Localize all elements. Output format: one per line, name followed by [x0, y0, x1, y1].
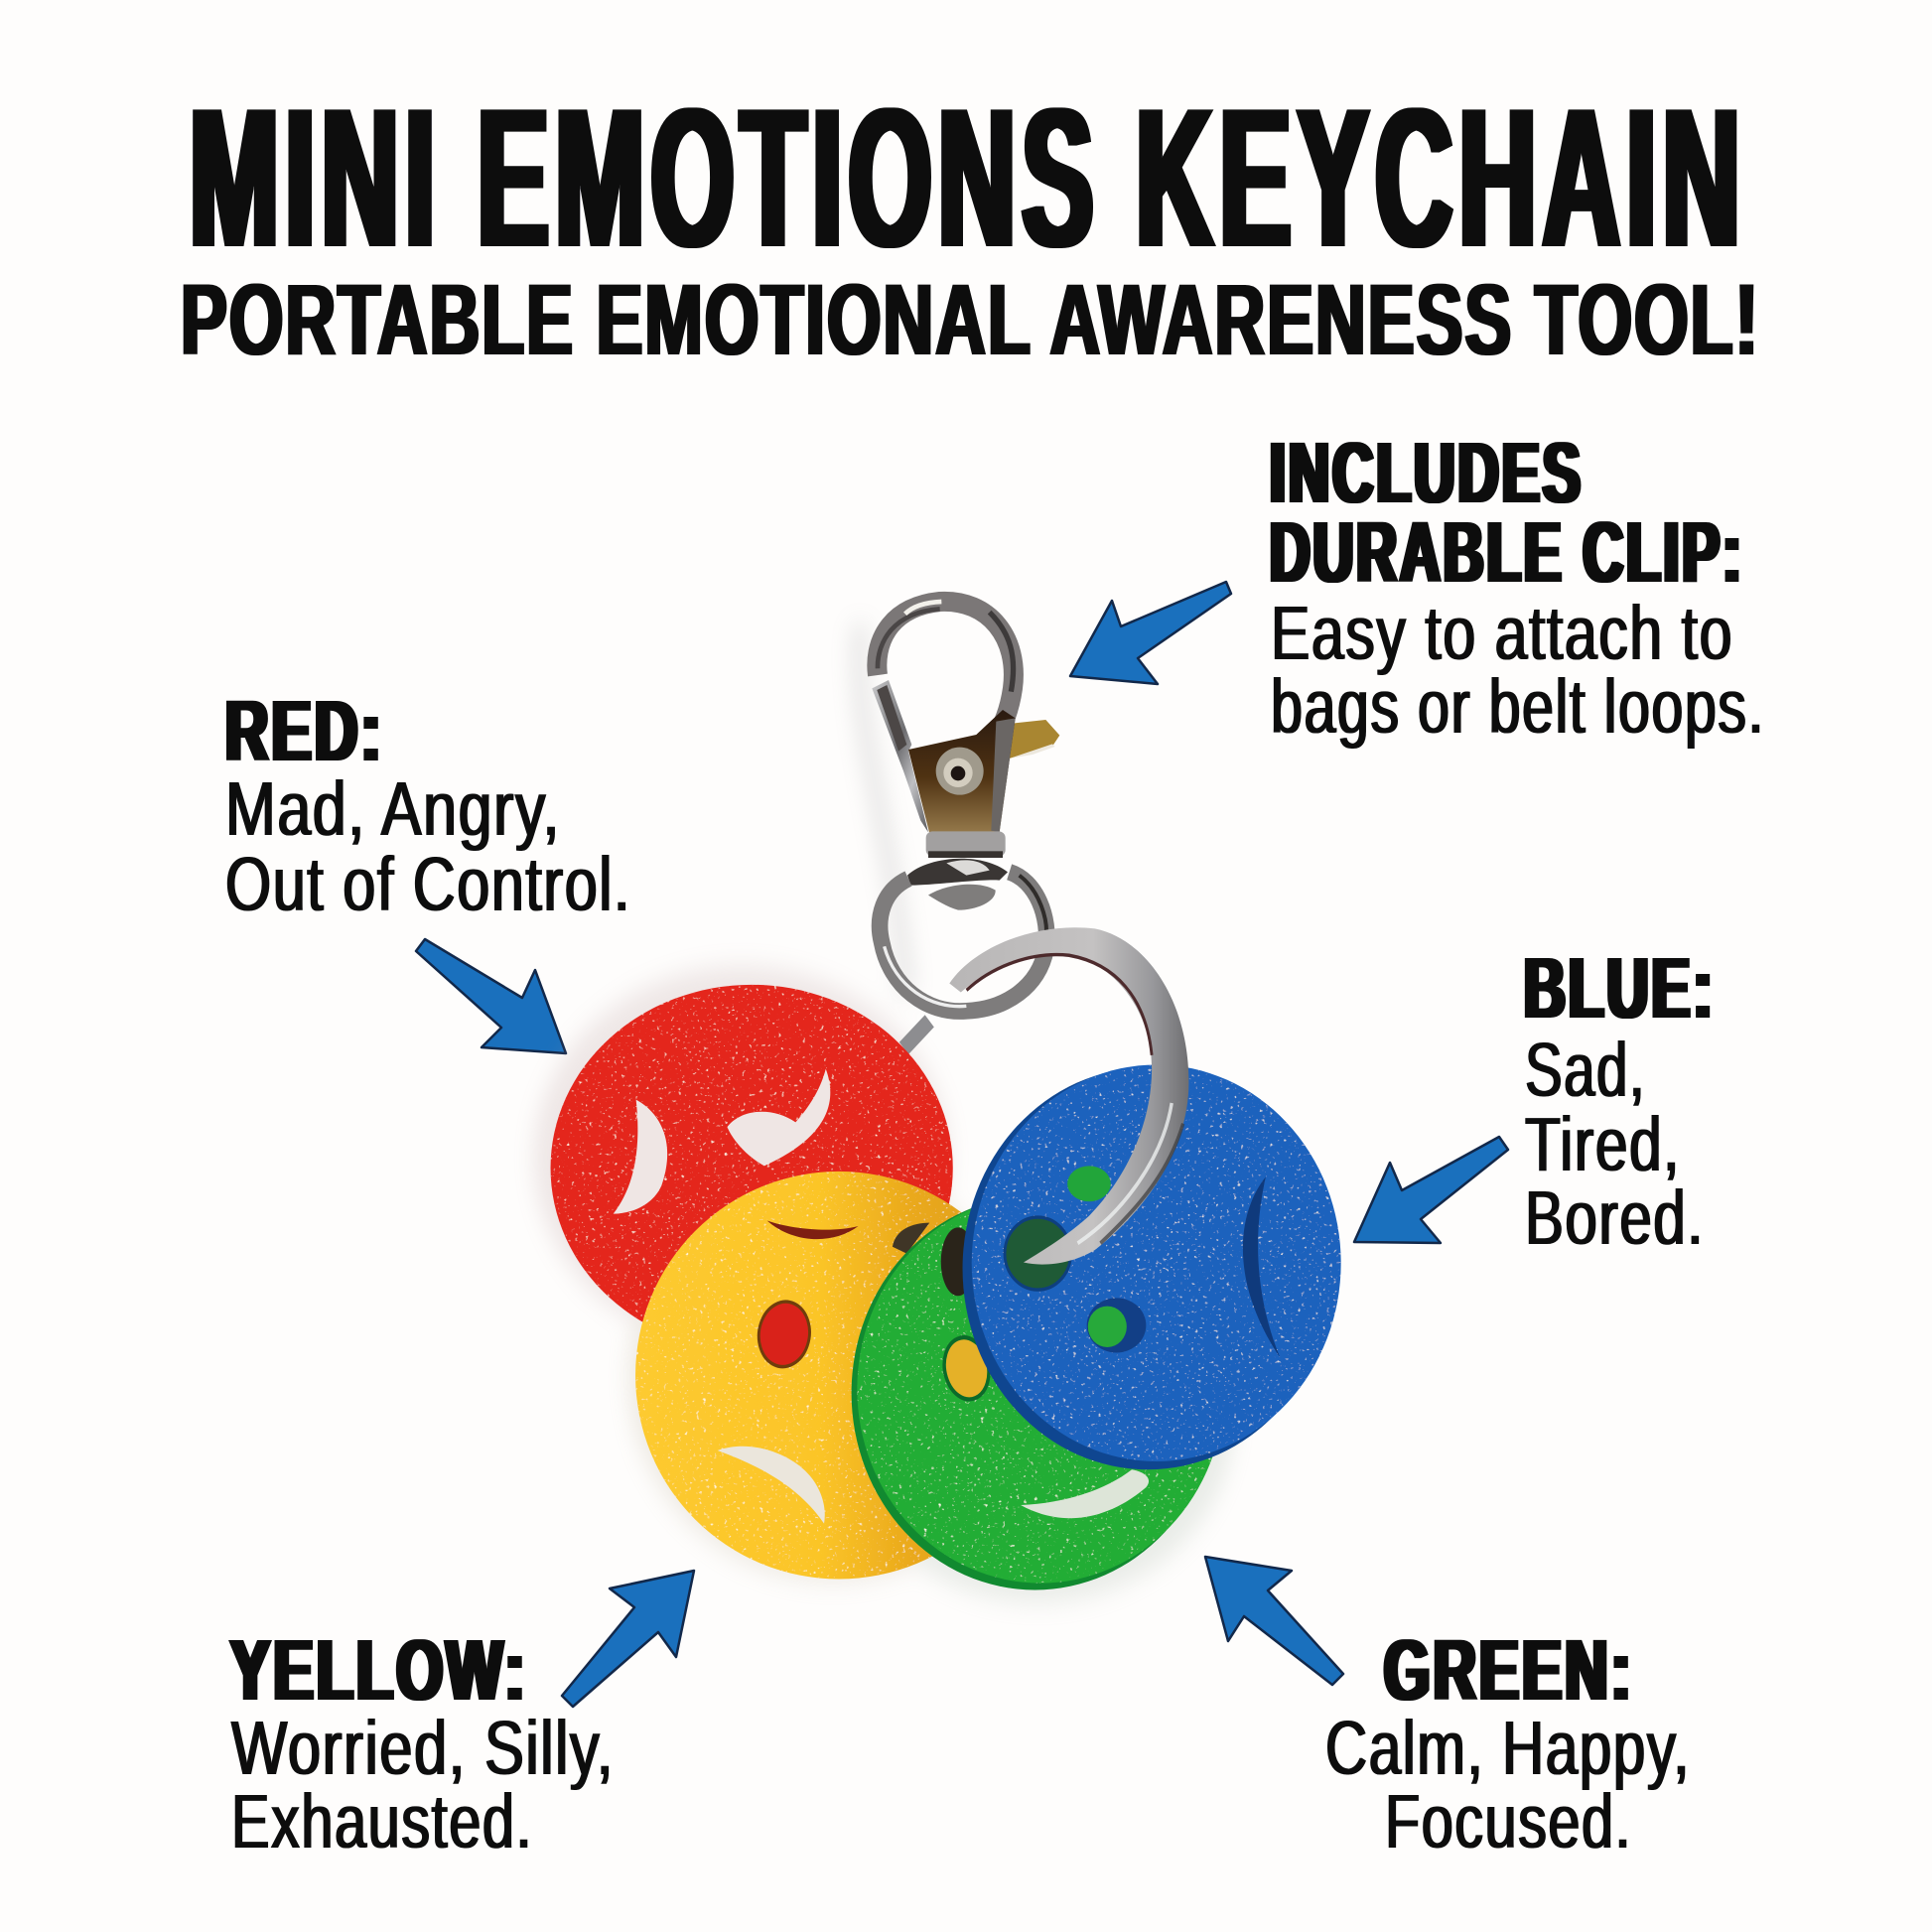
blue mouth	[1243, 1176, 1280, 1357]
blue eye lower	[1087, 1298, 1146, 1352]
callout: yellow: Worried, Silly,	[231, 1706, 615, 1791]
body	[908, 710, 1016, 832]
lever	[1010, 720, 1059, 759]
arrow: to yellow	[562, 1571, 694, 1707]
callout: green: GREEN:	[1384, 1622, 1634, 1719]
red mouth	[727, 1069, 830, 1166]
callout: red: Mad, Angry,	[225, 766, 561, 852]
discs	[551, 927, 1341, 1589]
callout: red	[225, 683, 631, 927]
D ring	[880, 872, 1046, 1012]
callout: yellow: YELLOW:	[230, 1622, 528, 1719]
callout: blue: Tired,	[1525, 1102, 1681, 1187]
callout: green: Calm, Happy,	[1325, 1706, 1691, 1791]
rivet	[936, 748, 984, 795]
keychain photo	[533, 602, 1341, 1602]
hook	[877, 602, 1014, 738]
callout: blue: Bored.	[1525, 1175, 1705, 1261]
yellow brow	[767, 1221, 858, 1239]
lobster clasp	[872, 602, 1059, 1012]
gate	[872, 680, 928, 832]
callout: blue: BLUE:	[1524, 940, 1716, 1036]
green eye 1	[941, 1227, 975, 1296]
callout: red: Out of Control.	[225, 842, 631, 927]
callout: durable clip	[1270, 425, 1765, 750]
blue disc	[963, 1064, 1341, 1469]
arrow: to blue	[1354, 1137, 1508, 1243]
callout: durable clip: Easy to attach to	[1271, 591, 1733, 676]
blue eye upper	[1067, 1166, 1111, 1201]
red disc	[551, 985, 953, 1351]
callout: green: Focused.	[1385, 1779, 1632, 1864]
swivel	[907, 859, 1008, 886]
callout: blue: Sad,	[1525, 1028, 1646, 1113]
yellow disc	[635, 1172, 1042, 1579]
green mouth	[1021, 1469, 1149, 1518]
green disc	[852, 1194, 1224, 1589]
arrow: to red	[416, 939, 566, 1053]
soft shadows	[533, 624, 1234, 1602]
split ring	[949, 927, 1188, 1265]
wire	[903, 1021, 929, 1048]
blue eye left	[1005, 1217, 1071, 1290]
callout: yellow: Exhausted.	[231, 1779, 533, 1864]
arrow: to clip	[1070, 582, 1231, 684]
callout: red: RED:	[225, 683, 384, 779]
collar	[926, 831, 1006, 857]
green eye 2	[937, 1330, 996, 1407]
arrow: to green	[1205, 1557, 1343, 1685]
yellow eye	[751, 1293, 818, 1376]
callout: durable clip: INCLUDES	[1270, 425, 1584, 521]
callout: durable clip: bags or belt loops.	[1271, 664, 1765, 750]
yellow mouth	[718, 1447, 825, 1524]
callout: blue	[1524, 940, 1716, 1261]
callout: green	[1325, 1622, 1691, 1864]
callout: yellow	[230, 1622, 615, 1864]
red eye	[614, 1100, 667, 1214]
